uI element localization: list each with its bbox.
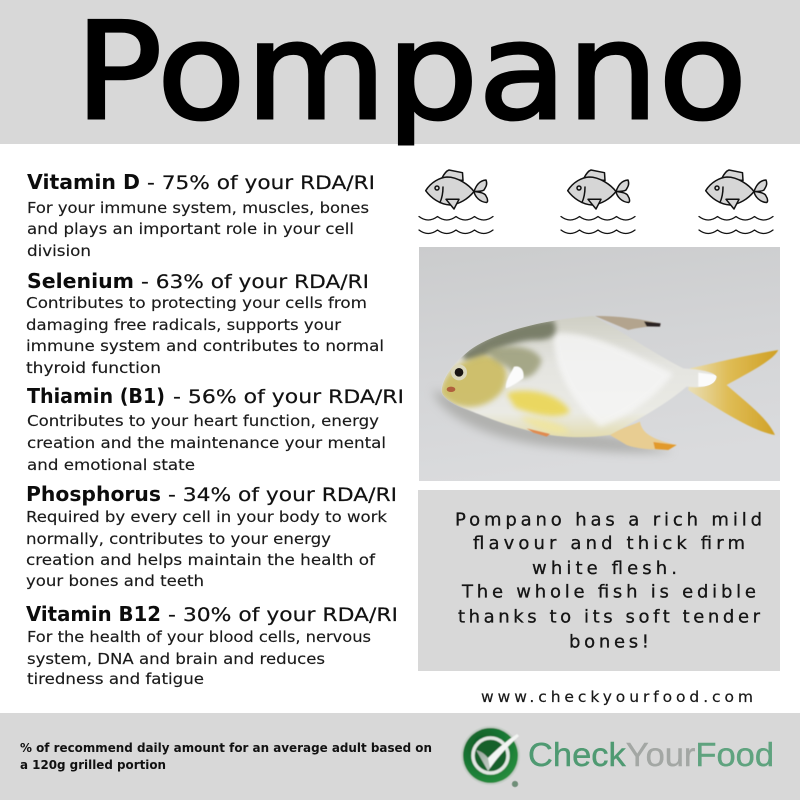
nutrient: selenium: Selenium <box>27 269 134 293</box>
nutrient: phosphorus: your bones and teeth <box>26 572 204 590</box>
website url: www.checkyourfood.com <box>481 688 753 706</box>
nutrient: vitamin B12: system, DNA and brain and reduces <box>27 650 325 668</box>
logo: CheckYourFood <box>461 726 774 787</box>
dorsal fin <box>595 316 661 330</box>
nutrient: vitamin B12: For the health of your blood cells, nervous <box>27 628 371 646</box>
nutrient: vitamin D: division <box>27 242 91 260</box>
logo wordmark: CheckYourFood <box>528 736 774 773</box>
nutrient: thiamin: creation and the maintenance your mental <box>27 434 386 452</box>
nutrient: phosphorus: Required by every cell in your body to work <box>26 508 387 526</box>
callout: flavour: thanks to its soft tender <box>458 606 761 628</box>
nutrient: phosphorus: creation and helps maintain the health of <box>26 551 376 569</box>
nutrient: vitamin D: For your immune system, muscles, bones <box>27 199 369 217</box>
nutrient: selenium: - 63% of your RDA/RI <box>141 271 369 293</box>
eye <box>451 364 467 380</box>
nutrient: vitamin B12: tiredness and fatigue <box>27 670 204 688</box>
nutrient: phosphorus: normally, contributes to your energy <box>26 530 331 548</box>
callout: flavour: The whole fish is edible <box>461 582 756 602</box>
nutrient: thiamin: Contributes to your heart function, energy <box>27 412 379 430</box>
nutrient: selenium: thyroid function <box>26 359 161 377</box>
nutrient: vitamin D: - 75% of your RDA/RI <box>147 172 375 194</box>
gill highlight <box>506 366 524 388</box>
callout: flavour: Pompano has a rich mild <box>455 510 762 530</box>
nostril <box>447 387 455 392</box>
nutrient: thiamin: - 56% of your RDA/RI <box>173 386 404 408</box>
logo mark <box>461 726 520 785</box>
body <box>442 316 717 437</box>
callout: flavour: bones! <box>569 632 649 652</box>
anal fin <box>610 422 677 449</box>
photo: pompano fish <box>419 247 780 481</box>
nutrient: thiamin <box>27 384 404 474</box>
footnote <box>20 741 432 772</box>
nutrient: vitamin D: Vitamin D <box>27 170 140 194</box>
nutrient: vitamin D <box>27 170 375 260</box>
nutrient: thiamin: and emotional state <box>27 456 195 474</box>
fish shadow <box>433 390 673 453</box>
tail fin <box>688 350 778 435</box>
nutrient: selenium: damaging free radicals, supports your <box>26 316 342 334</box>
nutrient: phosphorus <box>26 482 397 590</box>
icons: fish over waves <box>419 170 773 234</box>
panel: nutrients <box>26 170 404 688</box>
footnote: a 120g grilled portion <box>20 758 166 772</box>
body markings <box>440 320 717 434</box>
nutrient: phosphorus: - 34% of your RDA/RI <box>168 484 397 506</box>
nutrient: vitamin B12: - 30% of your RDA/RI <box>168 604 398 626</box>
nutrient: vitamin D: and plays an important role in your cell <box>27 220 354 238</box>
callout: flavour <box>418 490 780 671</box>
logo registered mark <box>512 781 518 787</box>
nutrient: vitamin B12: Vitamin B12 <box>26 602 161 626</box>
nutrient: selenium: immune system and contributes to normal <box>26 337 384 355</box>
nutrient: vitamin B12 <box>26 602 398 688</box>
callout: flavour: flavour and thick firm <box>473 533 745 554</box>
header band <box>0 0 800 144</box>
footer band <box>0 713 800 800</box>
nutrient: selenium: Contributes to protecting your cells from <box>26 294 367 312</box>
footnote: % of recommend daily amount for an average adult based on <box>20 741 432 755</box>
nutrient: selenium <box>26 269 384 377</box>
callout: flavour: white flesh. <box>532 558 677 579</box>
nutrient: phosphorus: Phosphorus <box>26 482 161 506</box>
nutrient: thiamin: Thiamin (B1) <box>27 384 165 408</box>
